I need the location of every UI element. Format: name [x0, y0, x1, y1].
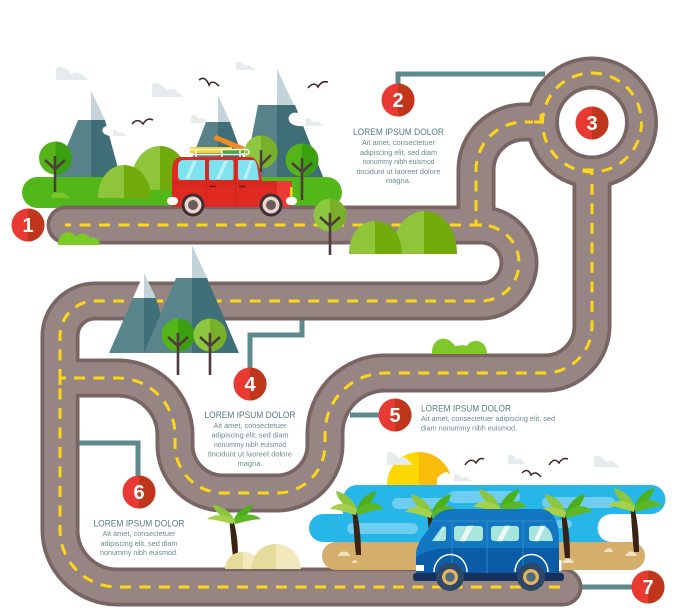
- text block 5: LOREM IPSUM DOLOR: [421, 404, 511, 414]
- text block 4: Ait amet, consectetuer: [214, 421, 287, 430]
- marker 1: [12, 208, 44, 242]
- sun: [387, 452, 452, 485]
- text block 2: magna.: [386, 176, 411, 185]
- marker 5: 5: [389, 405, 401, 427]
- text block 4: [204, 410, 296, 468]
- roof load: [185, 135, 249, 157]
- marker 3: [576, 106, 608, 140]
- wheel arches: [434, 554, 548, 572]
- connectors: [78, 74, 636, 587]
- scene: mountains and meadow: [22, 62, 342, 208]
- windows: [178, 160, 259, 180]
- bumpers: [167, 197, 178, 205]
- text block 2: adipiscing elit, sed diam: [360, 148, 437, 157]
- text block 2: tincidunt ut laoreet dolore: [356, 167, 440, 176]
- text block 6: [94, 518, 185, 557]
- tree C: [286, 144, 318, 200]
- marker 7: [632, 570, 664, 604]
- mountain middle: [180, 95, 255, 190]
- text block 4: magna.: [238, 459, 262, 468]
- marker 3: 3: [586, 113, 598, 135]
- hills: [51, 146, 190, 198]
- marker 5: [378, 398, 412, 432]
- mountain right: [242, 69, 327, 187]
- text block 4: nonummy nibh euismod: [214, 440, 286, 449]
- tree A: [39, 142, 72, 192]
- wheels: [182, 194, 282, 216]
- road centre dashes: [60, 73, 642, 587]
- mountain left: [50, 91, 123, 187]
- land palm and dunes: [207, 505, 301, 569]
- tree B: [244, 136, 278, 172]
- beach clouds and birds: [454, 455, 620, 481]
- marker 4: 4: [244, 374, 256, 396]
- marker 2: [382, 84, 414, 116]
- clouds: [56, 62, 323, 136]
- tree on road: [314, 198, 346, 255]
- text block 2: [353, 127, 444, 185]
- road borders: [60, 73, 642, 587]
- text block 5: diam nonummy nibh euismod.: [421, 424, 517, 432]
- marker 7: 7: [642, 577, 654, 599]
- marker 2: 2: [392, 90, 404, 112]
- bush: [432, 339, 487, 354]
- blue bus: [413, 509, 564, 591]
- scene: beach: [309, 452, 666, 570]
- bush by start: [58, 232, 100, 245]
- text block 2: LOREM IPSUM DOLOR: [353, 127, 444, 137]
- mountains and trees mid: [109, 245, 239, 375]
- text block 2: nonummy nibh euismod: [362, 157, 434, 166]
- text block 2: Ait amet, consectetuer: [362, 138, 435, 147]
- bus wheels: [436, 563, 545, 591]
- text block 4: tincidunt ut laoreet dolore: [208, 450, 292, 458]
- text block 4: adipiscing elit, sed diam: [212, 430, 288, 440]
- text block 6: adipiscing elit, sed diam: [100, 539, 178, 548]
- text block 5: Ait amet, consectetuer adipiscing elit, sed: [421, 414, 555, 423]
- sand: [322, 542, 645, 570]
- palms: [330, 491, 384, 555]
- road: [60, 73, 642, 587]
- text block 6: LOREM IPSUM DOLOR: [94, 518, 185, 528]
- marker 6: [122, 476, 156, 508]
- road surface: [60, 73, 642, 587]
- marker 4: [234, 368, 266, 400]
- sea: [309, 485, 666, 542]
- meadow: [22, 177, 342, 208]
- hills on road: [349, 211, 457, 254]
- bumper: [413, 573, 564, 581]
- text block 4: LOREM IPSUM DOLOR: [204, 410, 296, 420]
- bus windows: [432, 526, 553, 541]
- text block 5: [421, 404, 555, 432]
- marker 6: 6: [133, 482, 145, 504]
- birds: [132, 78, 328, 124]
- red car: [167, 135, 297, 216]
- text block 6: nonummy nibh euismod.: [100, 548, 178, 557]
- text block 6: Ait amet, consectetuer: [102, 529, 176, 538]
- marker 1: 1: [22, 215, 34, 237]
